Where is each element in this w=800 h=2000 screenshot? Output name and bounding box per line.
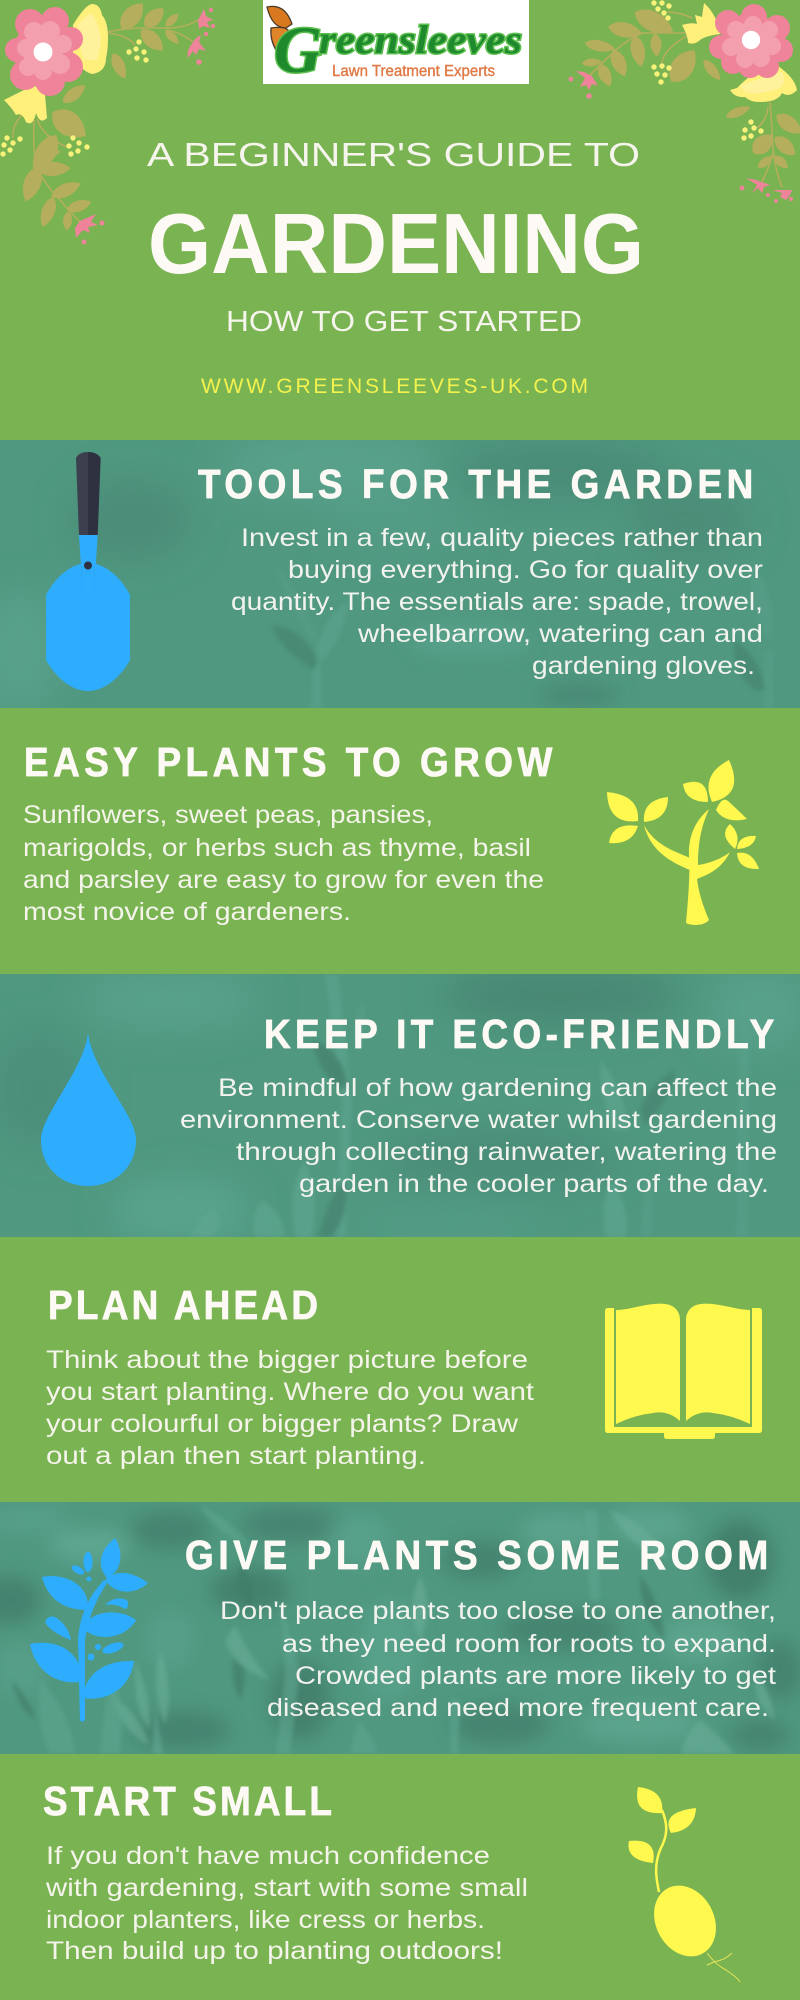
body text: your colourful or bigger plants? Draw xyxy=(46,1410,519,1438)
icon: trowel xyxy=(46,452,130,691)
logo xyxy=(263,0,529,87)
panel: keep it eco-friendly xyxy=(0,965,800,1245)
panel: start small xyxy=(43,1779,740,1982)
floral corner: top left xyxy=(0,0,215,245)
yellow berries xyxy=(651,0,764,141)
icon: water drop xyxy=(41,1033,136,1186)
website url: WWW.GREENSLEEVES-UK.COM xyxy=(201,375,588,398)
logo wordmark initial: G xyxy=(274,14,322,87)
photo background xyxy=(0,1502,800,1754)
yellow flower xyxy=(72,4,108,74)
body text: Sunflowers, sweet peas, pansies, xyxy=(23,801,433,829)
body text: indoor planters, like cress or herbs. xyxy=(46,1906,485,1934)
body text: Then build up to planting outdoors! xyxy=(46,1937,503,1965)
body text: buying everything. Go for quality over xyxy=(288,556,763,584)
icon: sprouting seed xyxy=(628,1787,740,1982)
body text xyxy=(180,1074,777,1198)
panel: plan ahead xyxy=(46,1283,762,1470)
body text xyxy=(46,1346,534,1470)
body text: gardening gloves. xyxy=(532,652,755,680)
yellow berries xyxy=(0,39,149,157)
body text: marigolds, or herbs such as thyme, basil xyxy=(23,834,531,862)
body text: If you don't have much confidence xyxy=(46,1842,490,1870)
panel: easy plants to grow xyxy=(23,740,759,926)
body text xyxy=(23,801,544,926)
body text: out a plan then start planting. xyxy=(46,1442,426,1470)
body text: and parsley are easy to grow for even the xyxy=(23,866,544,894)
body text: Think about the bigger picture before xyxy=(46,1346,528,1374)
body text: Be mindful of how gardening can affect the xyxy=(218,1074,777,1102)
photo background xyxy=(0,430,800,710)
pink flower xyxy=(5,7,83,96)
body text: environment. Conserve water whilst gardening xyxy=(180,1106,777,1134)
body text: you start planting. Where do you want xyxy=(46,1378,534,1406)
body text: through collecting rainwater, watering the xyxy=(236,1138,777,1166)
body text xyxy=(220,1597,776,1722)
body text: most novice of gardeners. xyxy=(23,898,351,926)
heading: TOOLS FOR THE GARDEN xyxy=(198,462,753,507)
logo tagline: Lawn Treatment Experts xyxy=(332,63,495,80)
icon: open book xyxy=(605,1304,762,1439)
icon: blue sprig xyxy=(30,1538,148,1722)
heading: KEEP IT ECO-FRIENDLY xyxy=(264,1012,774,1057)
panel: give plants some room xyxy=(0,1502,800,1754)
body text xyxy=(231,524,763,680)
title: line one: A BEGINNER'S GUIDE TO xyxy=(147,136,640,173)
icon: young tree xyxy=(607,760,759,925)
floral corner: top right xyxy=(568,0,800,203)
logo butterfly xyxy=(267,6,292,50)
panel: tools for the garden xyxy=(0,430,800,710)
body text: as they need room for roots to expand. xyxy=(282,1630,776,1658)
lower yellow flower xyxy=(4,85,47,123)
small pink blossoms xyxy=(568,71,793,203)
body text: diseased and need more frequent care. xyxy=(267,1694,769,1722)
pink flower xyxy=(709,4,793,78)
lower yellow flower xyxy=(730,66,797,102)
body text: Don't place plants too close to one another, xyxy=(220,1597,776,1625)
heading: EASY PLANTS TO GROW xyxy=(24,740,552,785)
body text: with gardening, start with some small xyxy=(45,1874,528,1902)
small pink blossoms xyxy=(75,8,215,244)
yellow flower xyxy=(682,3,720,44)
heading: START SMALL xyxy=(43,1779,332,1824)
panel: header xyxy=(0,0,800,398)
body text: Crowded plants are more likely to get xyxy=(295,1662,776,1690)
logo wordmark remainder: reensleeves xyxy=(319,17,522,62)
subtitle: HOW TO GET STARTED xyxy=(226,306,582,338)
body text xyxy=(45,1842,528,1965)
heading: GIVE PLANTS SOME ROOM xyxy=(185,1533,768,1578)
body text: Invest in a few, quality pieces rather than xyxy=(241,524,763,552)
body text: wheelbarrow, watering can and xyxy=(357,620,763,648)
title: gardening: GARDENING xyxy=(148,197,644,292)
heading: PLAN AHEAD xyxy=(48,1283,318,1328)
body text: quantity. The essentials are: spade, trowel, xyxy=(231,588,763,616)
photo background xyxy=(0,965,800,1245)
body text: garden in the cooler parts of the day. xyxy=(299,1170,769,1198)
